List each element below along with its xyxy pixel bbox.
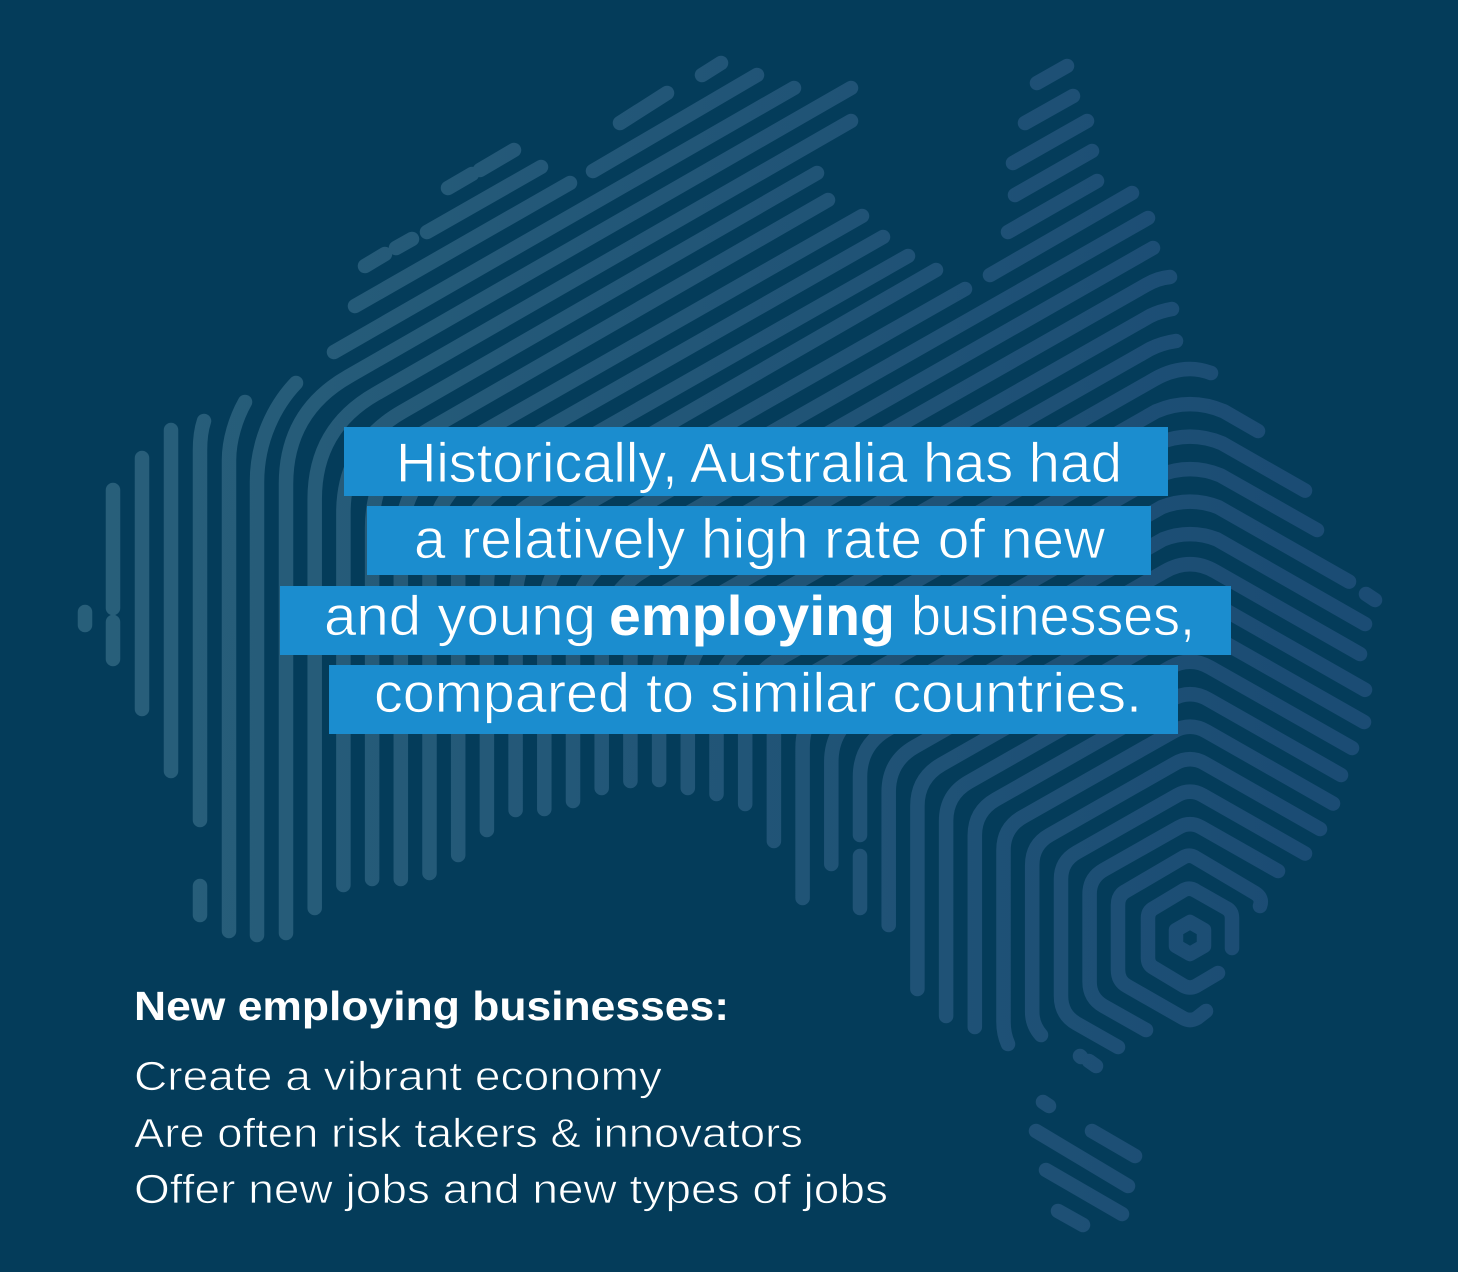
headline text: businesses, — [911, 584, 1195, 647]
headline text: a relatively high rate of new — [414, 507, 1106, 570]
highlight bar: line 3 — [280, 586, 1231, 655]
highlight bar: line 2 — [367, 506, 1151, 575]
headline text: and young — [324, 584, 596, 647]
list of benefits — [134, 1053, 888, 1212]
highlight bar: line 1 — [344, 427, 1168, 496]
list of benefits: Offer new jobs and new types of jobs — [134, 1166, 888, 1212]
highlight bar: line 4 — [329, 665, 1178, 734]
headline text — [324, 431, 1195, 724]
headline text: compared to similar countries. — [374, 661, 1142, 724]
headline text: employing — [609, 584, 895, 647]
headline text: Historically, Australia has had — [396, 431, 1122, 494]
list of benefits: Create a vibrant economy — [134, 1053, 663, 1099]
list of benefits: Are often risk takers & innovators — [134, 1110, 803, 1156]
subheading: New employing businesses: — [134, 983, 729, 1029]
